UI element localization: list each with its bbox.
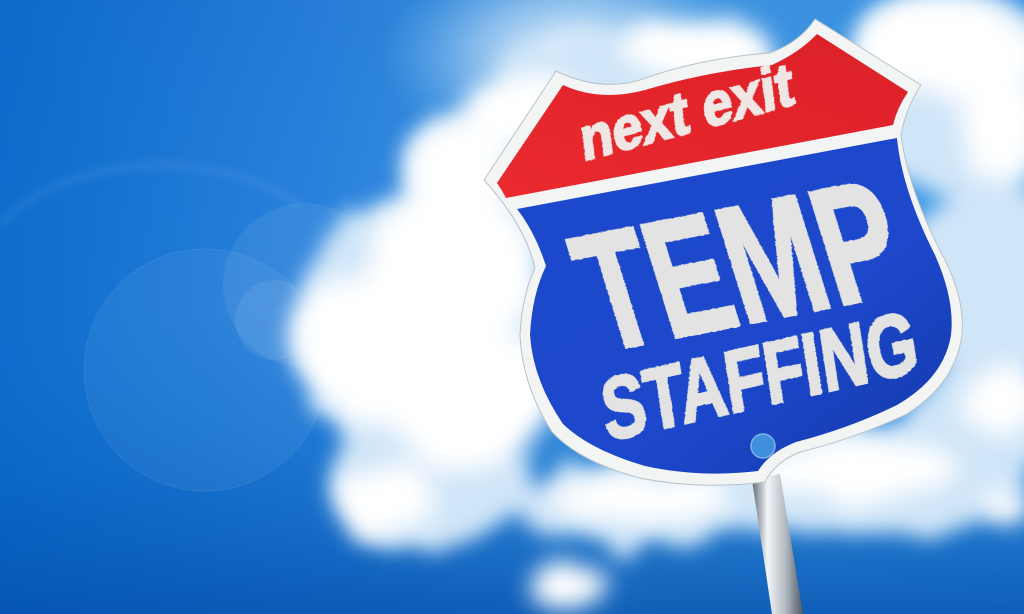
- bolt: [751, 434, 775, 458]
- clouds: [295, 0, 1024, 611]
- cloud highlight layer: [295, 0, 1024, 611]
- red header panel: [497, 34, 908, 198]
- lens flares: [0, 165, 400, 491]
- blue main panel: [517, 138, 952, 474]
- text: next exit: next exit: [577, 50, 797, 174]
- text: STAFFING: STAFFING: [595, 292, 924, 460]
- road sign shield: [484, 19, 962, 485]
- sign white border: [484, 19, 962, 485]
- cloud shade layer: [295, 0, 1024, 550]
- sign pole: [752, 474, 803, 614]
- sun glow: [380, 0, 760, 165]
